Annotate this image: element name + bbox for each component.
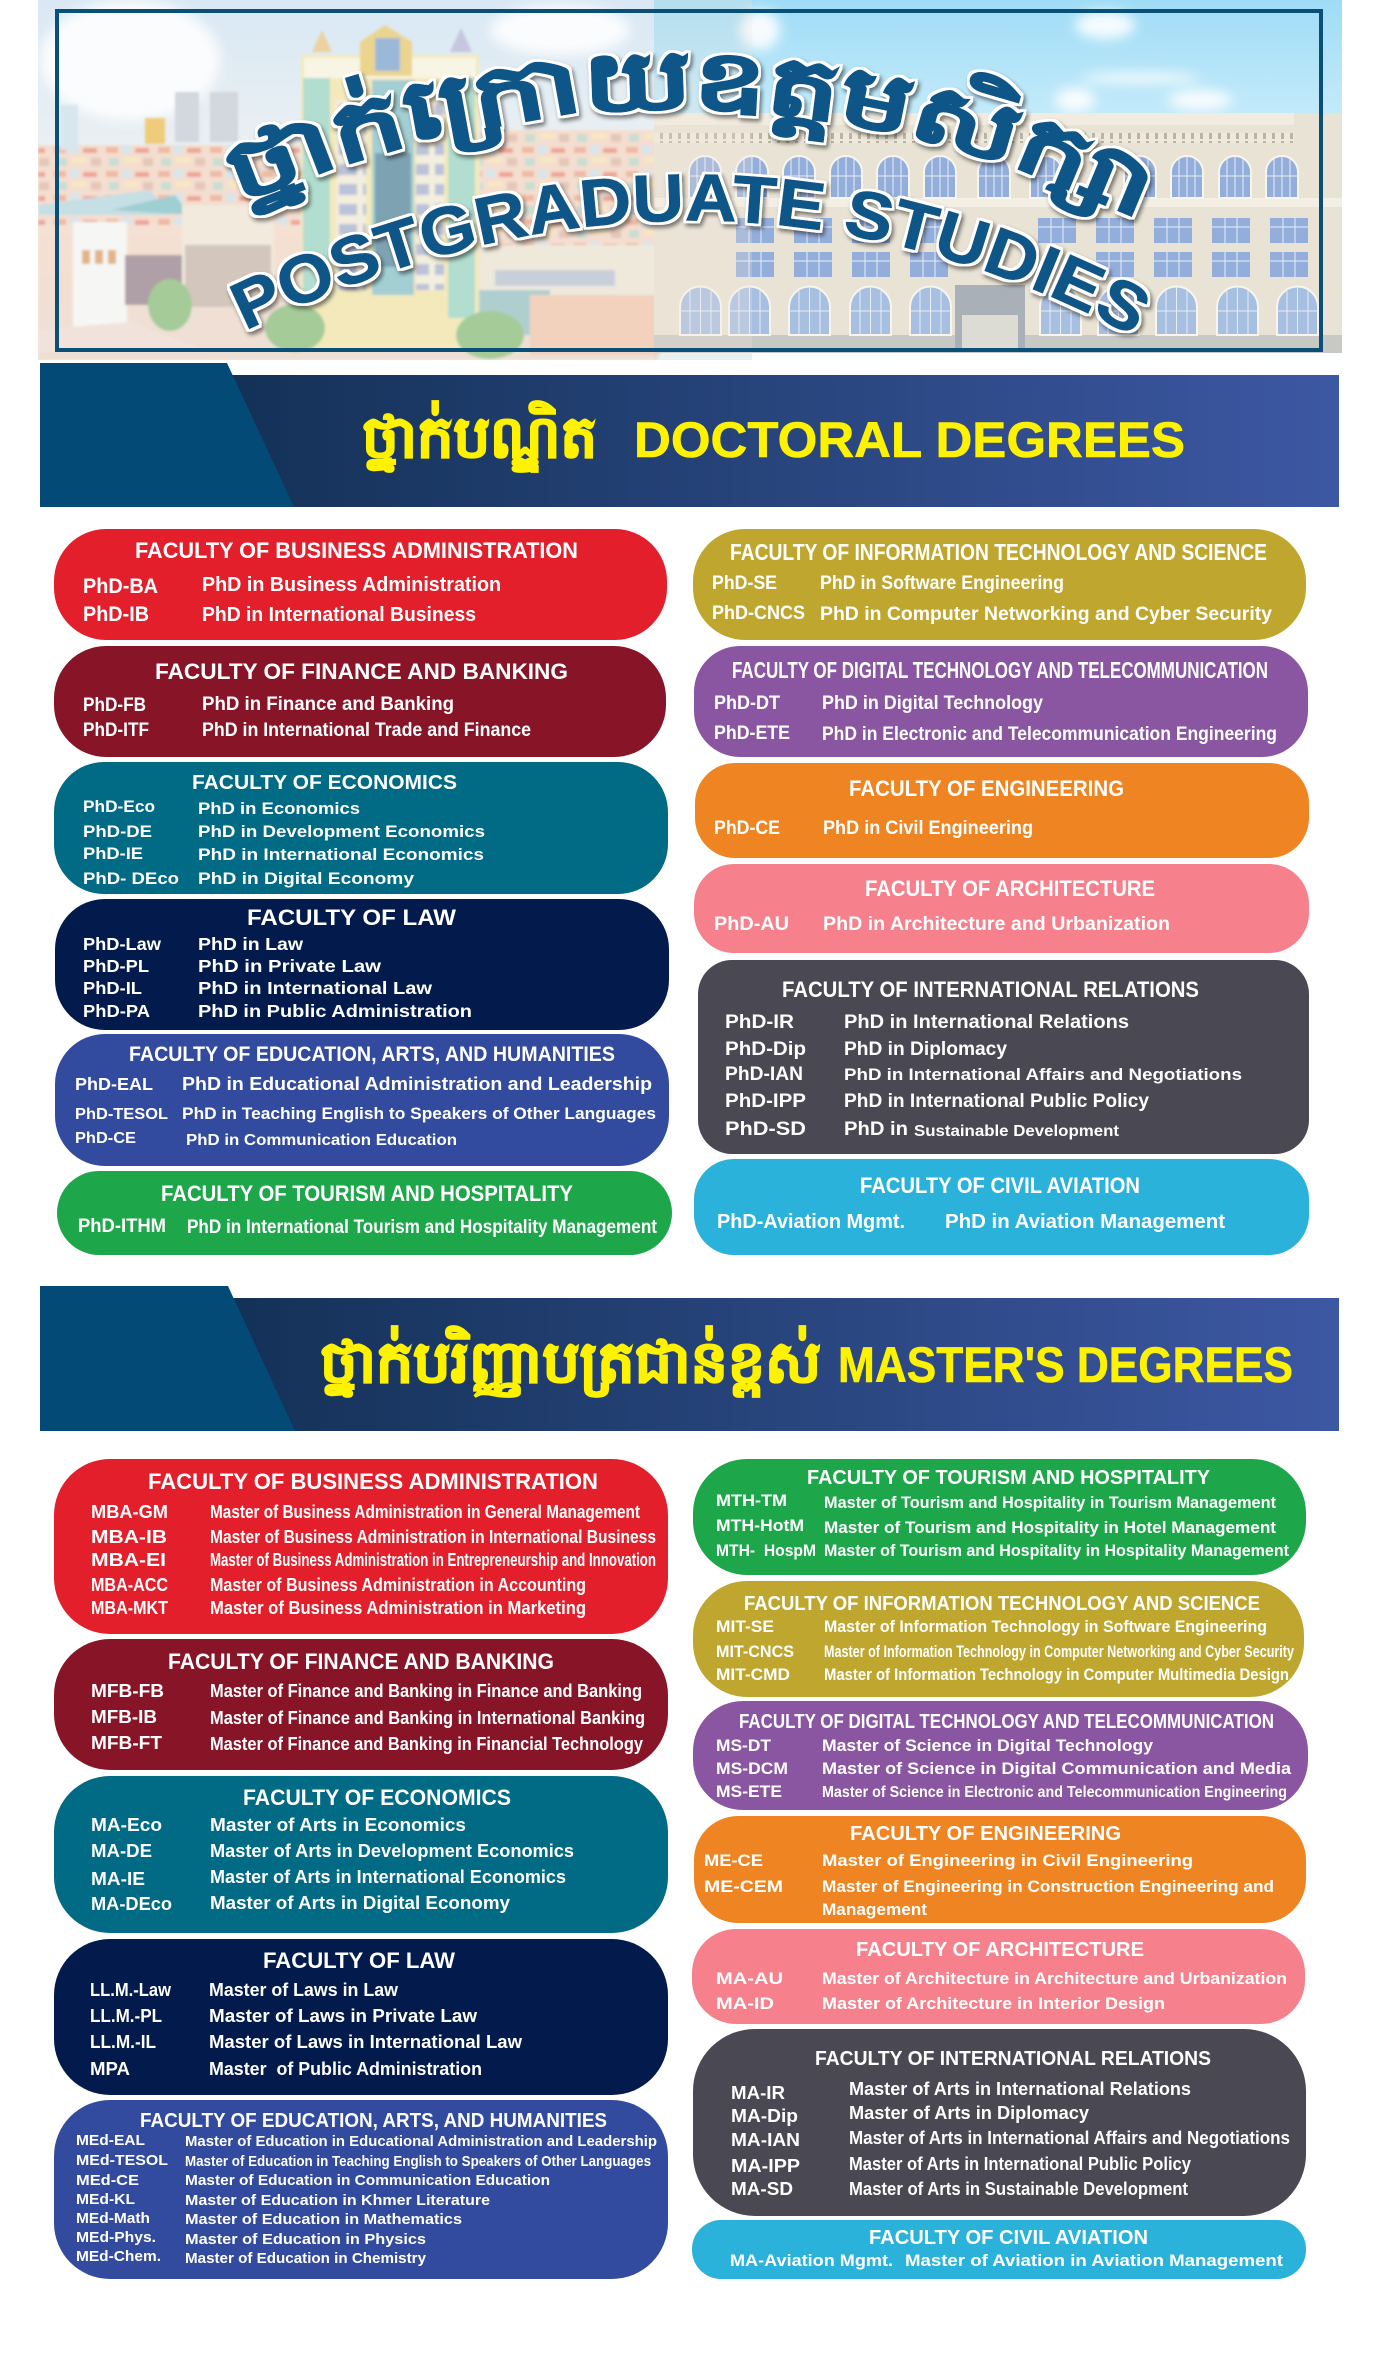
programs xyxy=(716,1491,1289,1560)
programs: Master of Finance and Banking in International Banking xyxy=(210,1708,645,1728)
programs: PhD-PL xyxy=(83,956,149,976)
trees xyxy=(148,279,524,359)
programs: MEd-CE xyxy=(76,2172,139,2189)
panel: doctoral digital technology and telecommunication xyxy=(694,646,1308,757)
programs: MEd-Math xyxy=(76,2210,150,2227)
programs: PhD in Digital Economy xyxy=(198,869,415,888)
programs: MBA-EI xyxy=(91,1550,166,1570)
panel: master information technology and science xyxy=(693,1581,1304,1697)
programs xyxy=(716,1969,1287,2013)
programs: Management xyxy=(822,1900,927,1919)
programs: PhD in Diplomacy xyxy=(844,1039,1007,1060)
programs: PhD in Private Law xyxy=(198,956,381,976)
programs: PhD in Software Engineering xyxy=(820,573,1064,594)
heading: FACULTY OF BUSINESS ADMINISTRATION xyxy=(148,1469,598,1494)
panel: doctoral tourism and hospitality xyxy=(57,1171,672,1255)
programs xyxy=(714,818,1033,839)
heading: FACULTY OF ARCHITECTURE xyxy=(865,876,1155,901)
hero frame xyxy=(57,11,1321,350)
programs: PhD in Public Administration xyxy=(198,1001,472,1021)
panel: master economics xyxy=(54,1776,668,1933)
programs: LL.M.-IL xyxy=(90,2032,156,2052)
programs: Master of Architecture in Interior Design xyxy=(822,1994,1165,2013)
panel: master digital technology and telecommunication xyxy=(693,1701,1308,1810)
programs: PhD in International Tourism and Hospitality Management xyxy=(187,1217,658,1238)
programs xyxy=(730,2252,1284,2270)
programs: PhD in Electronic and Telecommunication Engineering xyxy=(822,724,1277,745)
English heading: DOCTORAL DEGREES xyxy=(634,412,1185,468)
programs: Master of Finance and Banking in Financial Technology xyxy=(210,1734,643,1754)
programs: MEd-TESOL xyxy=(76,2152,168,2169)
panel: master law xyxy=(54,1939,668,2095)
heading: FACULTY OF CIVIL AVIATION xyxy=(860,1173,1140,1198)
panel: doctoral economics xyxy=(54,762,668,894)
programs: Master of Education in Teaching English to Speakers of Other Languages xyxy=(185,2153,651,2170)
panel: master civil aviation xyxy=(692,2220,1306,2279)
programs: MEd-Chem. xyxy=(76,2248,161,2265)
programs: MA-Dip xyxy=(731,2106,798,2126)
programs: Master of Laws in Private Law xyxy=(209,2006,478,2026)
programs: PhD-CE xyxy=(75,1130,136,1147)
programs: Master of Arts in International Relations xyxy=(849,2079,1191,2099)
heading: FACULTY OF INFORMATION TECHNOLOGY AND SCIENCE xyxy=(744,1592,1260,1615)
programs: MA-Aviation Mgmt. xyxy=(730,2252,893,2270)
programs: PhD-ITHM xyxy=(78,1216,166,1237)
programs: PhD-IL xyxy=(83,978,142,998)
programs: Master of Arts in International Affairs and Negotiations xyxy=(849,2128,1290,2148)
programs: Master of Finance and Banking in Finance and Banking xyxy=(210,1681,642,1701)
programs xyxy=(91,1681,645,1754)
section banner: master's degrees xyxy=(40,1286,1339,1431)
programs: PhD-IAN xyxy=(725,1064,803,1085)
programs: MA-DE xyxy=(91,1841,152,1861)
programs: PhD in International Law xyxy=(198,978,432,998)
heading: FACULTY OF EDUCATION, ARTS, AND HUMANITIES xyxy=(129,1043,615,1066)
programs: Master of Education in Khmer Literature xyxy=(185,2192,490,2209)
heading: FACULTY OF TOURISM AND HOSPITALITY xyxy=(161,1181,573,1206)
programs: Master of Arts in Diplomacy xyxy=(849,2103,1089,2123)
programs: Master of Education in Communication Education xyxy=(185,2172,550,2189)
programs: PhD-CNCS xyxy=(712,603,805,624)
programs: MA-ID xyxy=(716,1994,774,2013)
heading: FACULTY OF CIVIL AVIATION xyxy=(869,2227,1148,2249)
panel: doctoral information technology and science xyxy=(693,529,1306,640)
programs: PhD in International Economics xyxy=(198,845,484,864)
programs: Master of Arts in Development Economics xyxy=(210,1841,574,1861)
panel: master education, arts and humanities xyxy=(54,2100,668,2279)
Khmer heading: ថ្នាក់បរិញ្ញាបត្រជាន់ខ្ពស់ xyxy=(320,1325,821,1398)
programs: PhD-SD xyxy=(725,1119,806,1140)
programs: LL.M.-PL xyxy=(90,2006,162,2026)
programs: PhD in Law xyxy=(198,934,303,954)
panel: doctoral engineering xyxy=(695,763,1309,858)
programs: Master of Business Administration in Entrepreneurship and Innovation xyxy=(210,1550,656,1570)
main tower xyxy=(301,25,479,350)
programs: PhD-EAL xyxy=(75,1074,153,1094)
programs: Master of Education in Mathematics xyxy=(185,2211,462,2228)
programs: MEd-Phys. xyxy=(76,2229,156,2246)
heading: FACULTY OF BUSINESS ADMINISTRATION xyxy=(135,538,578,563)
programs: PhD in Development Economics xyxy=(198,822,485,841)
programs: PhD-FB xyxy=(83,695,146,716)
programs: MBA-MKT xyxy=(91,1598,168,1618)
section banner: doctoral degrees xyxy=(40,363,1339,507)
programs: PhD-ETE xyxy=(714,723,790,744)
English title: POSTGRADUATE STUDIES xyxy=(226,172,1155,339)
heading: FACULTY OF ECONOMICS xyxy=(243,1785,511,1810)
programs: MBA-IB xyxy=(91,1527,167,1547)
programs: PhD-BA xyxy=(83,575,158,598)
programs: PhD-IE xyxy=(83,844,143,863)
programs: MA-SD xyxy=(731,2179,793,2199)
English heading: MASTER'S DEGREES xyxy=(838,1337,1293,1393)
programs: MA-Eco xyxy=(91,1815,162,1835)
panel: master engineering xyxy=(694,1816,1306,1923)
programs: PhD in Computer Networking and Cyber Security xyxy=(820,604,1272,625)
Khmer title: ថ្នាក់ក្រោយឧត្តមសិក្សា xyxy=(222,50,1156,226)
panel: master finance and banking xyxy=(54,1639,668,1770)
programs: PhD-Aviation Mgmt. xyxy=(717,1211,905,1233)
programs: Sustainable Development xyxy=(914,1123,1119,1140)
programs xyxy=(717,1211,1225,1233)
programs: PhD in Communication Education xyxy=(186,1132,457,1149)
programs: Master of Arts in International Economics xyxy=(210,1867,566,1887)
programs: Master of Science in Digital Communication and Media xyxy=(822,1759,1292,1778)
programs: PhD in Business Administration xyxy=(202,574,501,596)
programs: Master of Science in Digital Technology xyxy=(822,1736,1154,1755)
programs: MPA xyxy=(90,2059,130,2079)
programs: PhD-SE xyxy=(712,573,777,594)
programs: MBA-GM xyxy=(91,1502,168,1522)
programs: MA-IE xyxy=(91,1869,145,1889)
programs: Master of Business Administration in Marketing xyxy=(210,1598,586,1618)
programs: PhD in Finance and Banking xyxy=(202,694,454,715)
city skyline xyxy=(38,92,660,360)
programs: PhD-IB xyxy=(83,603,149,626)
programs: PhD-IR xyxy=(725,1012,794,1033)
programs: PhD in Educational Administration and Leadership xyxy=(182,1074,652,1094)
heading: FACULTY OF LAW xyxy=(263,1948,455,1973)
programs: MIT-SE xyxy=(716,1617,774,1636)
programs: MEd-KL xyxy=(76,2191,135,2208)
programs: Master of Science in Electronic and Telecommunication Engineering xyxy=(822,1784,1287,1801)
programs: Master of Arts in Digital Economy xyxy=(210,1893,510,1913)
programs xyxy=(83,694,531,741)
programs xyxy=(90,1980,523,2079)
programs xyxy=(83,934,472,1021)
programs: PhD in Economics xyxy=(198,799,360,818)
programs: PhD-IPP xyxy=(725,1091,806,1112)
programs: Master of Business Administration in International Business xyxy=(210,1527,656,1547)
programs: MS-ETE xyxy=(716,1782,782,1801)
heading: FACULTY OF LAW xyxy=(247,905,456,930)
programs: Master of Information Technology in Computer Multimedia Design xyxy=(824,1665,1289,1684)
programs: Master of Education in Educational Administration and Leadership xyxy=(185,2133,657,2150)
programs: PhD-Law xyxy=(83,934,161,954)
heading: FACULTY OF INTERNATIONAL RELATIONS xyxy=(815,2047,1211,2070)
programs: PhD- DEco xyxy=(83,869,179,888)
programs: Master of Laws in Law xyxy=(209,1980,399,2000)
programs xyxy=(731,2079,1290,2199)
programs: Master of Arts in Sustainable Development xyxy=(849,2179,1188,2199)
programs: MTH-HotM xyxy=(716,1516,804,1535)
panel: doctoral business administration xyxy=(54,529,667,640)
panel: doctoral architecture xyxy=(694,864,1309,953)
programs: MA-DEco xyxy=(91,1894,172,1914)
programs xyxy=(725,1012,1242,1140)
programs: PhD-DE xyxy=(83,822,152,841)
faculty building xyxy=(654,113,1344,353)
programs: MBA-ACC xyxy=(91,1575,168,1595)
programs: PhD-PA xyxy=(83,1001,150,1021)
programs: Master of Tourism and Hospitality in Hospitality Management xyxy=(824,1541,1289,1560)
hero banner xyxy=(38,0,1342,360)
programs: MIT-CNCS xyxy=(716,1642,794,1661)
programs: PhD-TESOL xyxy=(75,1106,168,1123)
programs: PhD-Dip xyxy=(725,1039,806,1060)
programs: PhD in Architecture and Urbanization xyxy=(823,914,1170,935)
programs xyxy=(704,1851,1274,1919)
campus photo background xyxy=(38,0,1344,361)
programs: PhD in International Trade and Finance xyxy=(202,720,531,741)
programs xyxy=(716,1617,1294,1684)
panel: master international relations xyxy=(693,2029,1306,2216)
programs: Master of Engineering in Civil Engineering xyxy=(822,1851,1193,1870)
panel: doctoral civil aviation xyxy=(694,1159,1309,1255)
programs: Master of Aviation in Aviation Management xyxy=(905,2252,1284,2270)
programs: Master of Business Administration in Accounting xyxy=(210,1575,586,1595)
heading: FACULTY OF DIGITAL TECHNOLOGY AND TELECOMMUNICATION xyxy=(739,1710,1274,1733)
programs: PhD in Digital Technology xyxy=(822,693,1043,714)
programs: Master of Arts in Economics xyxy=(210,1815,466,1835)
heading: FACULTY OF ECONOMICS xyxy=(192,772,457,794)
programs xyxy=(712,573,1272,625)
programs: MA-IAN xyxy=(731,2130,800,2150)
programs: MS-DCM xyxy=(716,1759,788,1778)
programs: PhD-ITF xyxy=(83,720,149,741)
heading: FACULTY OF ENGINEERING xyxy=(849,776,1124,801)
programs xyxy=(83,797,485,888)
panel: master tourism and hospitality xyxy=(693,1459,1306,1575)
programs: PhD in Civil Engineering xyxy=(823,818,1033,839)
programs xyxy=(83,574,501,626)
programs xyxy=(716,1736,1292,1801)
heading: FACULTY OF FINANCE AND BANKING xyxy=(155,659,568,684)
programs: Master of Information Technology in Software Engineering xyxy=(824,1617,1267,1636)
programs: MFB-IB xyxy=(91,1707,157,1727)
programs: Master of Education in Chemistry xyxy=(185,2250,427,2267)
programs: MTH-TM xyxy=(716,1491,787,1510)
programs: LL.M.-Law xyxy=(90,1980,172,2000)
programs: MA-IR xyxy=(731,2083,785,2103)
programs: PhD in International Affairs and Negotiations xyxy=(844,1065,1242,1084)
heading: FACULTY OF TOURISM AND HOSPITALITY xyxy=(807,1466,1210,1489)
programs: Master of Education in Physics xyxy=(185,2231,426,2248)
programs: PhD-AU xyxy=(714,914,789,935)
programs: Master of Engineering in Construction Engineering and xyxy=(822,1877,1274,1896)
programs: PhD in International Business xyxy=(202,604,476,626)
panel: doctoral international relations xyxy=(698,960,1309,1154)
heading: FACULTY OF FINANCE AND BANKING xyxy=(168,1649,554,1674)
programs: MEd-EAL xyxy=(76,2132,145,2149)
heading: FACULTY OF ENGINEERING xyxy=(850,1822,1121,1845)
programs: MFB-FB xyxy=(91,1681,164,1701)
programs xyxy=(714,693,1277,745)
programs xyxy=(91,1815,574,1914)
heading: FACULTY OF INTERNATIONAL RELATIONS xyxy=(782,977,1199,1002)
programs: MS-DT xyxy=(716,1736,772,1755)
heading: FACULTY OF EDUCATION, ARTS, AND HUMANITIES xyxy=(140,2109,607,2132)
programs: PhD-DT xyxy=(714,693,780,714)
heading: FACULTY OF ARCHITECTURE xyxy=(856,1938,1144,1961)
programs xyxy=(75,1074,656,1149)
heading: FACULTY OF INFORMATION TECHNOLOGY AND SCIENCE xyxy=(730,539,1267,565)
programs: Master of Architecture in Architecture and Urbanization xyxy=(822,1969,1287,1988)
programs: MTH- HospM xyxy=(716,1541,816,1560)
programs: ME-CE xyxy=(704,1851,763,1870)
programs: PhD in International Relations xyxy=(844,1012,1129,1033)
programs: ME-CEM xyxy=(704,1877,783,1896)
programs: PhD-CE xyxy=(714,818,780,839)
programs: Master of Business Administration in General Management xyxy=(210,1502,640,1522)
programs: MA-AU xyxy=(716,1969,783,1988)
panel: master business administration xyxy=(54,1459,668,1634)
panel: master architecture xyxy=(692,1929,1305,2024)
Khmer heading: ថ្នាក់បណ្ឌិត xyxy=(362,400,597,473)
programs: MA-IPP xyxy=(731,2156,800,2176)
programs: Master of Laws in International Law xyxy=(209,2032,523,2052)
programs: PhD-Eco xyxy=(83,797,155,816)
programs: Master of Arts in International Public Policy xyxy=(849,2154,1191,2174)
programs: MFB-FT xyxy=(91,1733,162,1753)
programs: MIT-CMD xyxy=(716,1665,790,1684)
programs: PhD in Aviation Management xyxy=(945,1211,1225,1233)
programs: Master of Public Administration xyxy=(209,2059,482,2079)
programs: Master of Tourism and Hospitality in Hotel Management xyxy=(824,1518,1276,1537)
programs: PhD in xyxy=(844,1119,908,1140)
programs: PhD in Teaching English to Speakers of Other Languages xyxy=(182,1104,656,1123)
programs xyxy=(91,1502,656,1618)
panel: doctoral law xyxy=(55,899,669,1030)
panel: doctoral finance and banking xyxy=(54,646,666,757)
programs xyxy=(76,2132,657,2267)
programs: Master of Tourism and Hospitality in Tourism Management xyxy=(824,1493,1276,1512)
panel: doctoral education, arts and humanities xyxy=(55,1034,669,1166)
programs: PhD in International Public Policy xyxy=(844,1091,1149,1112)
